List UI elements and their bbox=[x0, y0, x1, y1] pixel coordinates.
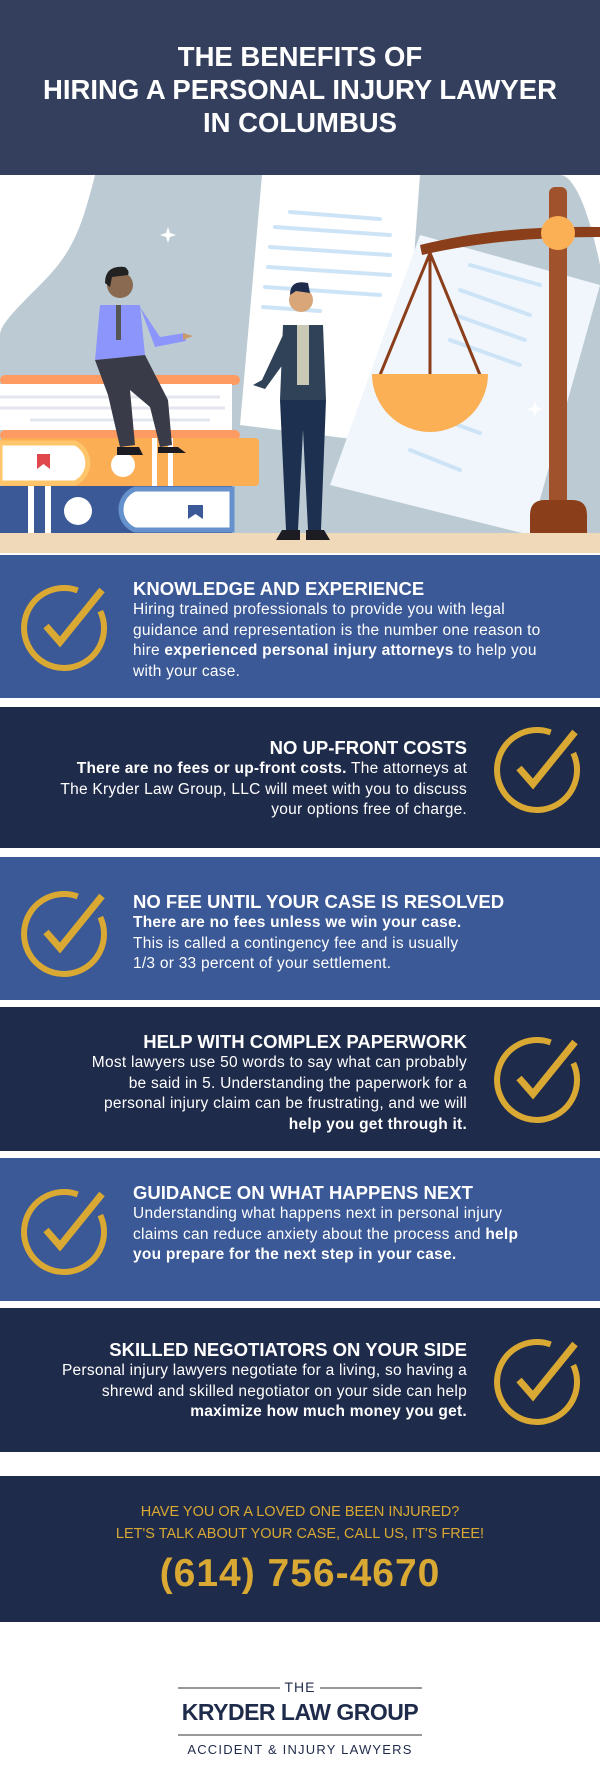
text: no up-front: The Kryder Law Group, LLC will meet with you to discuss bbox=[60, 780, 467, 798]
illustration: lawyers with books and scale bbox=[0, 175, 600, 553]
text: negotiators: Personal injury lawyers negotiate for a living, so having a bbox=[62, 1362, 467, 1379]
text: knowledge: hire experienced personal injury attorneys to help you bbox=[133, 642, 537, 659]
text: paperwork bbox=[92, 1031, 467, 1132]
text: knowledge: guidance and representation is the number one reason to bbox=[133, 622, 541, 638]
text: paperwork: Most lawyers use 50 words to say what can probably bbox=[92, 1054, 467, 1071]
books stack bbox=[0, 375, 259, 533]
icon: check circle bbox=[21, 1189, 107, 1275]
cta text: HAVE YOU OR A LOVED ONE BEEN INJURED? bbox=[141, 1504, 459, 1520]
title header: IN COLUMBUS bbox=[203, 107, 397, 138]
text: negotiators: SKILLED NEGOTIATORS ON YOUR SIDE bbox=[109, 1339, 467, 1360]
text: no up-front: your options free of charge. bbox=[271, 801, 467, 818]
cta text: LET'S TALK ABOUT YOUR CASE, CALL US, IT'S FREE! bbox=[116, 1526, 484, 1542]
text: negotiators bbox=[62, 1339, 467, 1420]
logo bbox=[178, 1679, 422, 1757]
cta text bbox=[116, 1504, 484, 1542]
text: no up-front: There are no fees or up-front costs. The attorneys at bbox=[77, 760, 467, 777]
text: no fee: There are no fees unless we win your case. bbox=[133, 914, 461, 931]
icon: check circle bbox=[494, 1037, 580, 1123]
logo: ACCIDENT & INJURY LAWYERS bbox=[187, 1742, 413, 1757]
text: knowledge: with your case. bbox=[133, 662, 240, 680]
call to action bbox=[0, 1476, 600, 1622]
standing man bbox=[253, 282, 330, 540]
text: no up-front bbox=[60, 737, 467, 818]
text: paperwork: be said in 5. Understanding the paperwork for a bbox=[129, 1074, 467, 1092]
logo: KRYDER LAW GROUP bbox=[182, 1699, 418, 1725]
text: guidance bbox=[133, 1182, 518, 1263]
panel: guidance bbox=[0, 1158, 600, 1301]
text: no fee bbox=[133, 891, 504, 972]
text: no fee: This is called a contingency fee and is usually bbox=[133, 934, 458, 952]
text: knowledge: Hiring trained professionals to provide you with legal bbox=[133, 601, 505, 618]
text: paperwork: help you get through it. bbox=[289, 1116, 467, 1132]
text: paperwork: HELP WITH COMPLEX PAPERWORK bbox=[143, 1031, 467, 1052]
icon: check circle bbox=[21, 891, 107, 977]
text: negotiators: shrewd and skilled negotiator on your side can help bbox=[102, 1382, 467, 1400]
floor bbox=[0, 533, 600, 553]
title header bbox=[0, 0, 600, 175]
panel: skilled negotiators bbox=[0, 1308, 600, 1452]
text: no up-front: NO UP-FRONT COSTS bbox=[270, 737, 467, 758]
text: knowledge bbox=[133, 578, 541, 680]
text: knowledge: KNOWLEDGE AND EXPERIENCE bbox=[133, 578, 424, 599]
scale of justice bbox=[372, 187, 600, 533]
title header: HIRING A PERSONAL INJURY LAWYER bbox=[43, 74, 557, 105]
icon: check circle bbox=[494, 1339, 580, 1425]
panel: knowledge and experience bbox=[0, 555, 600, 698]
text: no fee: NO FEE UNTIL YOUR CASE IS RESOLVED bbox=[133, 891, 504, 912]
icon: check circle bbox=[21, 585, 108, 671]
logo: THE bbox=[284, 1679, 316, 1695]
paper documents bbox=[240, 175, 600, 535]
title header: THE BENEFITS OF bbox=[178, 41, 422, 72]
phone number: (614) 756-4670 bbox=[160, 1552, 440, 1595]
text: paperwork: personal injury claim can be frustrating, and we will bbox=[104, 1095, 467, 1112]
text: guidance: GUIDANCE ON WHAT HAPPENS NEXT bbox=[133, 1182, 473, 1203]
icon: sparkles bbox=[160, 227, 543, 417]
sitting man bbox=[95, 267, 193, 455]
text: no fee: 1/3 or 33 percent of your settlement. bbox=[133, 955, 391, 972]
panel: no fee until resolved bbox=[0, 857, 600, 1000]
text: guidance: claims can reduce anxiety about the process and help bbox=[133, 1226, 518, 1242]
text: guidance: Understanding what happens next in personal injury bbox=[133, 1205, 502, 1222]
text: negotiators: maximize how much money you get. bbox=[190, 1403, 467, 1420]
panel: complex paperwork bbox=[0, 1007, 600, 1151]
panel: no up-front costs bbox=[0, 707, 600, 848]
text: guidance: you prepare for the next step in your case. bbox=[133, 1246, 456, 1263]
icon: check circle bbox=[494, 727, 580, 813]
